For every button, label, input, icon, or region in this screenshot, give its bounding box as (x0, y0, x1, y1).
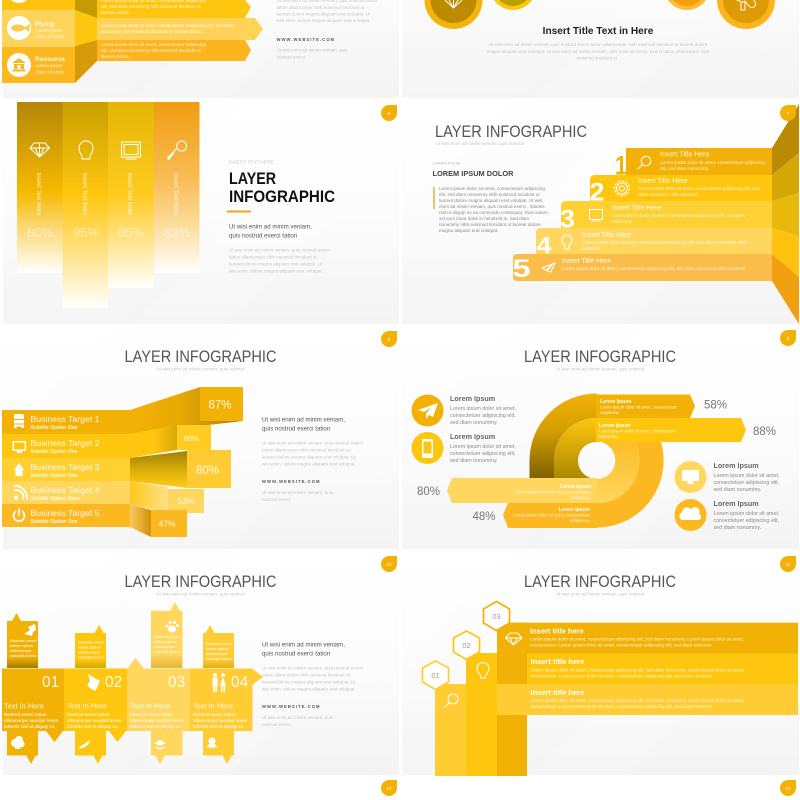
segment text: Text In Here (67, 702, 107, 710)
segment text: Text In Here (193, 702, 233, 710)
upper tab text: Nostrud exerci (154, 635, 181, 639)
left descriptions (450, 394, 516, 464)
icon: bulb (477, 662, 489, 678)
side text: laoreet dolore magna aliquam erat volutpat. Ut (276, 12, 371, 16)
side text: quis nostrud exerci tation (262, 426, 331, 432)
upper tab text: suscipit lorem (206, 657, 232, 661)
paragraph: Ut wisi enim ad minim veniam, quis nostrud exerci tation ullamcorper nibh euismod tincidunt ut laoreet dolore (489, 42, 708, 47)
percent values: 60% (183, 434, 199, 443)
badge: page 9 (780, 330, 796, 346)
side text (262, 416, 363, 502)
text block: nonummy nibh euismod tincidunt ut laoreet dolore (439, 222, 541, 227)
target labels (30, 415, 100, 525)
band text: Lorem ipsum dolor sit amet, consectetuer adipiscing elit, sed diam nonummy. Lorem ipsum dolor sit amet, (530, 668, 744, 672)
step 2: Lorem ipsum dolor sit amet, consectetuer adipiscing elit, sed (638, 186, 760, 191)
target labels: Subtitle Option One (30, 473, 78, 479)
text block: Ut wisi enim ad minim veniam, (229, 224, 312, 230)
side text: Ut wisi enim ad minim veniam, quis nostrud exerci (262, 666, 363, 670)
heading: Ut wisi enim ad minim veniam, quis nostrud (156, 366, 245, 372)
side text: Ut wisi enim ad minim veniam, (262, 642, 345, 648)
left block labels (35, 21, 65, 74)
upper tab text: suscipit lorem (154, 650, 180, 654)
badge: page 8: 8 (388, 337, 391, 342)
icon: paw print (166, 621, 179, 632)
horizontal band (2, 658, 263, 742)
segment text: lobortis nisl ut aliquip ex. (130, 724, 181, 729)
band text: Lorem Ipsum (600, 399, 632, 405)
icon: octopus (206, 738, 218, 749)
banner text: Lorem ipsum dolor sit amet, consectetuer adipiscing (101, 42, 206, 47)
step 5: 5 (512, 255, 531, 283)
step 1: Lorem ipsum dolor sit amet, consectetuer adipiscing (660, 160, 765, 165)
upper tab text: tation option (10, 644, 34, 648)
heading (124, 348, 277, 372)
side text: quis nostrud exerci tation (262, 650, 331, 658)
segment text: lobortis nisl ut aliquip ex. (67, 724, 118, 729)
band text: Lorem ipsum dolor sit amet, consectetuer adipiscing elit, sed diam nonummy. Lorem ipsum dolor sit amet, (530, 636, 744, 642)
step 2: 2 (590, 178, 604, 206)
upper tab text: suscipit lorem (78, 656, 104, 660)
segment text: ullamcorper suscipit lorem (130, 718, 185, 723)
icon: server stack (14, 414, 24, 428)
icon: graduation cap (154, 740, 166, 750)
segment text: lobortis nisl ut aliquip ex. (193, 724, 244, 729)
icon: monitor (12, 441, 26, 453)
band text: Lorem Ipsum (560, 484, 592, 490)
icon: top circle (7, 0, 31, 3)
segment text: Nostrud exerci tation (130, 712, 173, 717)
band text (513, 399, 677, 523)
percent labels: 80% (417, 486, 440, 498)
heading: LAYER (229, 169, 276, 188)
heading: LAYER INFOGRAPHIC (435, 123, 587, 141)
left descriptions: Lorem ipsum dolor sit amet, (450, 444, 516, 450)
panel: slide 5 flying and resource layers (2, 0, 399, 98)
left descriptions: Lorem ipsum dolor sit amet, (450, 406, 516, 412)
heading: Ut wisi enim ad minim veniam, quis nostrud (556, 592, 645, 596)
badge: page 10 (381, 556, 397, 572)
badge: page 13 (780, 780, 796, 796)
badge: page 12 (381, 780, 397, 796)
band text: consectetuer. Lorem ipsum dolor sit amet, consectetuer adipiscing elit, sed diam nonumm. (530, 674, 713, 678)
side text: tation ullamcorper nibh euismod tincidunt ut (262, 448, 350, 452)
banner text: elit, sed diam nonummy nibh euismod tincidunt ut (101, 48, 201, 53)
icon: diamond (30, 143, 50, 157)
segment numbers (42, 674, 249, 691)
icon: key (168, 141, 187, 160)
step 1 (615, 148, 772, 180)
icon: horn outline (737, 0, 756, 10)
segment numbers: 02 (105, 674, 122, 691)
side text: WWW.WEBSITE.COM (262, 479, 321, 484)
text block: LOREM IPSUM DOLOR (432, 169, 514, 178)
hexagon 02 (454, 631, 480, 660)
percent labels: 88% (753, 426, 776, 438)
upper tab text (10, 635, 233, 661)
paragraph (487, 42, 710, 60)
heading (524, 348, 676, 372)
column percentages (27, 225, 190, 240)
ring segments (530, 393, 664, 528)
percent values: 80% (196, 465, 219, 477)
heading: Ut wisi enim ad minim veniam, quis nostrud (436, 141, 525, 146)
step 4 (536, 228, 772, 260)
banner text: laoreet dolore. (101, 10, 130, 15)
text block: magna aliquam erat volutpat. (439, 228, 498, 233)
band text: adipiscing. (600, 410, 620, 415)
band text: adipiscing. (570, 518, 590, 523)
badge: page 10: 10 (387, 562, 392, 567)
heading: LAYER INFOGRAPHIC (124, 348, 277, 366)
banner text: laoreet dolore. (101, 54, 130, 59)
side text: wisi enim. dolore magna aliquam erat volutpat. (262, 462, 356, 466)
segment text (4, 702, 248, 729)
side text: wisi enim. dolore magna aliquam erat volutpat. (262, 686, 356, 692)
panel: slide 9 spiral rings (402, 328, 799, 549)
band text: Insert title here (530, 626, 584, 636)
percent values: 47% (158, 518, 176, 528)
left descriptions: Lorem Ipsum (450, 394, 495, 403)
icon: flying fish badge (7, 16, 31, 40)
fold connectors (75, 0, 97, 83)
hexagon 01 (422, 661, 448, 690)
badge: page 12: 12 (387, 786, 392, 791)
side text: wisi enim. dolore magna aliquam erat volutpat. (276, 18, 370, 23)
heading: LAYER INFOGRAPHIC (524, 573, 676, 591)
columns (435, 623, 527, 776)
icon: push pin (24, 624, 36, 636)
downward tabs (7, 731, 234, 764)
upper tab text: tation option (206, 647, 230, 651)
upper tab text: ullamcorper (78, 650, 100, 654)
segment numbers: 01 (42, 674, 59, 691)
heading (524, 573, 676, 596)
left descriptions: sed diam nonummy. (450, 458, 498, 464)
left block labels: dolor sit amet, (36, 70, 65, 74)
step 4: 4 (536, 232, 552, 260)
hexagon 03: 03 (492, 612, 501, 621)
text block: nisl ut aliquip ex ea commodo consequat. Duis autem (439, 210, 548, 215)
left descriptions: consectetuer adipiscing elit, (450, 451, 516, 457)
heading: LAYER INFOGRAPHIC (524, 348, 676, 366)
target bands (2, 410, 130, 527)
side text: WWW.WEBSITE.COM (262, 704, 321, 709)
band text: Lorem ipsum dolor sit amet, consectetuer (513, 512, 591, 518)
side text: tation ullamcorper nibh euismod tincidunt ut (276, 5, 365, 10)
right descriptions: sed diam nonummy. (714, 487, 761, 493)
step 4: euismod. (582, 246, 600, 251)
icon: diamond lines (445, 0, 462, 8)
text block: enim ad minim veniam, quis nostrud exerci . lobortis (439, 204, 545, 209)
target labels: Subtitle Option Oner (30, 496, 80, 502)
bands (497, 623, 798, 715)
column labels: Insert Text Here (35, 173, 42, 216)
text block: wisi enim. dolore magna aliquam erat volutpat. (229, 268, 323, 274)
upper tab text: Nostrud exerci (10, 639, 37, 643)
step 5 (512, 254, 772, 283)
badge: page 6: 6 (388, 111, 391, 116)
text block (432, 160, 548, 233)
segment numbers: 04 (231, 674, 249, 691)
text block: laoreet dolore magna aliquam erat volutpat. Ut wisi (439, 198, 542, 203)
percent values: 87% (208, 400, 232, 412)
icon: diamond (506, 633, 522, 645)
upper tab text: ullamcorper (10, 649, 32, 653)
step 4: Insert Title Here (582, 232, 632, 239)
banner text: nonummy nibh euismod tincidunt ut laoreet dolore. (101, 29, 203, 34)
arrow bands (447, 394, 746, 528)
heading: Ut wisi enim ad minim veniam, quis nostrud (556, 366, 645, 372)
side text: nostrud exerci (276, 54, 305, 60)
badge: page 11 (780, 556, 796, 572)
side text: tation ullamcorper nibh euismod tincidunt ut (262, 672, 350, 678)
band text: Lorem ipsum dolor sit amet, consectetuer (599, 428, 676, 434)
heading (124, 573, 277, 596)
hexagon 02: 02 (462, 641, 471, 650)
percent labels: 58% (704, 400, 727, 412)
badge: page 9: 9 (787, 336, 790, 341)
icon: bulb (79, 141, 93, 159)
badge: page 7: 7 (787, 111, 790, 116)
band text: Lorem ipsum dolor sit amet, consectetuer adipiscing elit, sed diam nonummy. Lorem ipsum dolor sit amet, (530, 698, 744, 703)
panel: slide 5b circles and title (402, 0, 799, 98)
percent boxes (151, 387, 243, 537)
badge: page 8 (381, 331, 397, 347)
paragraph: euismod tincidunt ut . (577, 56, 619, 60)
text block: laoreet dolore magna aliquam erat volutpat. Ut (229, 262, 323, 266)
hexagon 01: 01 (431, 671, 440, 680)
step 2: diam nonummy nibh euismod . (638, 192, 700, 197)
side text: Ut wisi enim ad minim veniam, quis nostrud exerci (262, 440, 363, 446)
side text (276, 0, 377, 60)
badge: page 11: 11 (786, 562, 791, 567)
hexagon 03 (484, 602, 510, 630)
step 3: Insert Title Here (612, 205, 662, 212)
right descriptions: Lorem Ipsum (714, 499, 759, 508)
heading: Ut wisi enim ad minim veniam, quis nostrud (156, 592, 245, 596)
upper tab text: ullamcorper (154, 645, 176, 649)
step 5: Insert Title Here (562, 258, 612, 265)
segment text: ullamcorper suscipit lorem (4, 718, 59, 723)
icon: paper plane circle (412, 394, 444, 426)
right descriptions: consectetuer adipiscing elit, (714, 480, 779, 486)
title: Insert Title Text in Here (543, 26, 654, 37)
step 3: Lorem ipsum dolor sit amet, consectetuer adipiscing elit, sed diam (612, 213, 745, 218)
side text: laoreet dolore magna aliquam erat volutpat. Ut (262, 454, 356, 460)
heading: LAYER INFOGRAPHIC (124, 573, 277, 591)
upper tab text: tation option (154, 640, 178, 644)
badge: page 6 (381, 105, 397, 121)
panel: slide 10 interlocking tabs (2, 553, 399, 775)
banner text: elit, sed diam nonummy nibh euismod tincidunt ut (101, 4, 201, 9)
segment text: Text In Here (130, 702, 170, 710)
banner text (101, 0, 234, 59)
target labels: Business Target 1 (30, 415, 100, 424)
step 1: elit, sed diam nonummy . (660, 166, 711, 171)
text block: quis nostrud exerci tation (229, 232, 298, 240)
panel: slide 11 hexagon stairs (402, 553, 799, 776)
left descriptions: Lorem Ipsum (450, 432, 495, 441)
text block: Lorem ipsum dolor sit amet, consectetuer adipiscing (439, 186, 545, 191)
icon: magnifier (445, 694, 458, 707)
icon: resource building badge (7, 53, 31, 77)
column percentages: 85% (118, 225, 144, 240)
column percentages: 80% (27, 225, 53, 240)
right descriptions: sed diam nonummy. (714, 525, 761, 531)
side text: nostrud exerci (262, 497, 291, 502)
panel: slide 8 business targets (2, 328, 399, 549)
side text: Ut wisi enim ad minim veniam, (262, 416, 345, 424)
icon: citrus slice (78, 740, 90, 748)
side text: Ut wisi enim ad minim veniam, quis (276, 48, 348, 52)
percent labels: 48% (472, 511, 496, 523)
segment text: ullamcorper suscipit lorem (67, 718, 122, 723)
text block: tation ullamcorper nibh euismod tincidunt ut (229, 254, 317, 260)
left descriptions: sed diam nonummy. (450, 420, 498, 426)
band text: adipiscing. (599, 434, 619, 439)
band text: consectetuer. Lorem ipsum dolor sit amet, consectetuer adipiscing elit, sed diam nonumm. (530, 642, 713, 648)
percent values (158, 400, 232, 528)
banner text: Lorem ipsum dolor sit amet, consectetuer adipiscing elit, sed diam (101, 23, 234, 28)
upper tab text: tation option (78, 646, 102, 650)
panel: slide 6 fading columns (3, 102, 399, 324)
icon: bird (87, 674, 100, 691)
side text: Ut wisi enim ad minim veniam, quis (262, 715, 334, 720)
upper tab text: Nostrud exerci (78, 640, 105, 644)
band text: Insert title here (530, 688, 584, 697)
icon: phone circle (412, 432, 444, 464)
heading: INSERT TEXT HERE (229, 160, 273, 164)
band text (530, 626, 744, 709)
step 5: Lorem ipsum dolor sit amet, consectetuer adipiscing elit, sed diam nonummy nibh euismod . (562, 266, 747, 271)
target labels: Subtitle Option One (30, 449, 78, 455)
target labels: Business Target 4 (30, 486, 100, 495)
target labels: Business Target 2 (30, 439, 100, 448)
target labels: Business Target 5 (30, 509, 100, 518)
paragraph: magna aliquam erat volutpat. Ut wisi enim ad minim veniam, quis nostrud exerci. exerci tation ullamcorper nibh (487, 49, 710, 54)
left block labels: dolor sit amet, (36, 34, 65, 39)
left block labels: Flying (35, 21, 54, 28)
step 2: Insert Title Here (638, 178, 688, 185)
right descriptions: Lorem Ipsum (714, 461, 759, 470)
columns (17, 102, 200, 308)
upper tab text: Nostrud exerci (206, 642, 233, 646)
icon: tree (11, 736, 24, 749)
badge: page 7 (780, 105, 796, 121)
percent labels (417, 400, 776, 523)
side text (262, 642, 363, 727)
text block: vel eum iriure dolor in hendrerit in. Sed diam (439, 216, 529, 221)
text block: Ut wisi enim ad minim veniam, quis nostrud exerci (229, 248, 330, 252)
upward tabs (7, 602, 234, 668)
band text: Lorem ipsum dolor sit amet, consectetuer (514, 490, 592, 494)
target labels: Subtitle Option One (30, 519, 78, 525)
right descriptions: consectetuer adipiscing elit, (714, 518, 779, 524)
column labels: Insert Text Here (172, 173, 179, 216)
circles (424, 0, 775, 29)
column labels: Insert Text Here (81, 173, 88, 216)
step 3 (560, 201, 772, 234)
left block labels: Lorem ipsum (36, 63, 62, 68)
band text: Lorem Ipsum (559, 507, 591, 513)
step 3: nonummy. (612, 219, 633, 224)
side text: WWW.WEBSITE.COM (276, 37, 335, 42)
segment text: Nostrud exerci tation (4, 712, 47, 717)
icon: monitor circle (674, 461, 706, 493)
segment text: Text In Here (4, 702, 44, 710)
icon: house (14, 463, 24, 476)
panel: slide 7 numbered steps (402, 102, 799, 324)
upper tab text: ullamcorper (206, 652, 228, 656)
step 2 (590, 175, 772, 206)
step 1: Insert Title Here (660, 152, 710, 158)
heading (227, 160, 335, 212)
step 1: 1 (615, 150, 627, 180)
step 3: 3 (560, 206, 575, 234)
band text: Lorem Ipsum (599, 423, 631, 429)
icon: rss (14, 486, 27, 500)
segment text: lobortis nisl ut aliquip ex. (4, 724, 55, 729)
badge: page 13: 13 (786, 786, 791, 791)
target labels: Subtitle Option One (30, 425, 78, 431)
target labels: Business Target 3 (30, 463, 100, 472)
band text: Insert title here (530, 657, 584, 666)
heading: INFOGRAPHIC (229, 187, 335, 206)
icon: power (13, 509, 25, 521)
percent values: 53% (177, 496, 195, 506)
text block: LOREM IPSUM (432, 160, 461, 166)
icon: monitor (122, 142, 140, 159)
left block labels: Resource (35, 56, 65, 63)
side text: nostrud exerci (262, 722, 291, 727)
left stacked blocks (2, 0, 75, 83)
segment numbers: 03 (168, 674, 185, 691)
text block (229, 224, 330, 274)
fold fan on right (772, 104, 799, 324)
segment text: ullamcorper suscipit lorem (193, 718, 248, 723)
right descriptions (714, 461, 779, 531)
column percentages: 83% (164, 225, 190, 240)
upper tab text: suscipit lorem (10, 654, 36, 658)
band text: consectetuer. Lorem ipsum dolor sit amet, consectetuer adipiscing elit, sed diam nonumm. (530, 704, 713, 709)
band text: adipiscing. (571, 495, 591, 500)
segment text: Nostrud exerci tation (67, 712, 110, 717)
right descriptions: Lorem ipsum dolor sit amet, (714, 511, 779, 517)
right descriptions: Lorem ipsum dolor sit amet, (714, 473, 779, 479)
band text: Lorem ipsum dolor sit amet, consectetuer (600, 404, 677, 410)
icon: cloud circle (674, 499, 706, 531)
left descriptions: consectetuer adipiscing elit, (450, 413, 516, 419)
segment text: Nostrud exerci tation (193, 712, 236, 717)
side text: laoreet dolore magna aliquam erat volutpat. Ut (262, 680, 356, 684)
arrow banners (97, 0, 263, 61)
column labels (35, 173, 179, 216)
left block labels: Lorem ipsum (36, 28, 62, 33)
column labels: Insert Text Here (126, 173, 133, 216)
side text: Ut wisi enim ad minim veniam, quis (262, 490, 334, 495)
connector folds (130, 387, 243, 537)
text block: elit, sed diam nonummy nibh euismod tincidunt ut (439, 192, 540, 197)
step 4: Lorem ipsum dolor sit amet, consectetuer adipiscing elit, sed diam nonummy nibh (582, 240, 746, 245)
column percentages: 95% (73, 225, 99, 240)
icon: people (212, 673, 226, 692)
